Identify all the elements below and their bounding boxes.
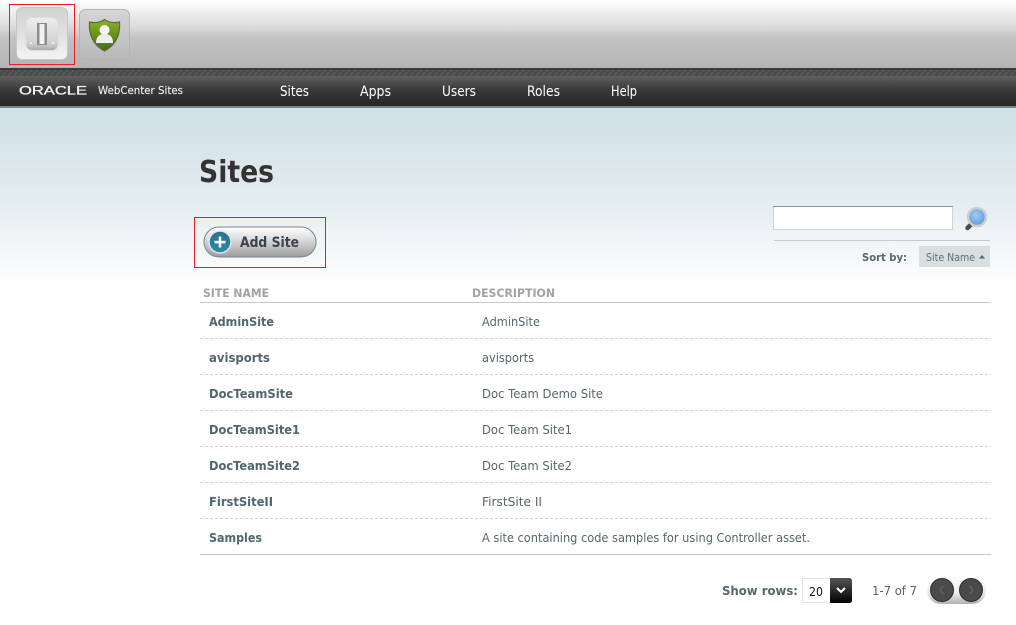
sort control: Sort by: xyxy=(862,251,907,264)
site names: DocTeamSite2 xyxy=(209,459,300,473)
navigation bar xyxy=(0,68,1016,108)
sort control: Site Name xyxy=(926,251,975,264)
icon: active sites tile xyxy=(16,8,68,60)
add site button: Add Site xyxy=(240,235,299,251)
top toolbar xyxy=(0,0,1016,68)
nav links: Sites xyxy=(280,84,309,100)
descriptions xyxy=(482,315,810,545)
nav links xyxy=(280,84,637,100)
sites table xyxy=(200,286,991,555)
site names: FirstSiteII xyxy=(209,495,273,509)
icon: plus xyxy=(209,231,231,253)
table header: SITE NAME xyxy=(203,286,269,300)
add site button xyxy=(204,227,316,257)
site names: DocTeamSite1 xyxy=(209,423,300,437)
site names: DocTeamSite xyxy=(209,387,293,401)
descriptions: A site containing code samples for using Controller asset. xyxy=(482,531,810,545)
site names: AdminSite xyxy=(209,315,274,329)
nav links: Roles xyxy=(527,84,560,100)
table header xyxy=(203,286,555,300)
icon: users shield tile xyxy=(80,10,130,60)
sort control xyxy=(862,246,990,267)
icon: magnifier xyxy=(968,208,986,228)
descriptions: AdminSite xyxy=(482,315,540,329)
site names: Samples xyxy=(209,531,262,545)
logo: Oracle WebCenter Sites: WebCenter Sites xyxy=(98,85,183,97)
descriptions: avisports xyxy=(482,351,534,365)
heading: Sites xyxy=(199,155,274,190)
search box xyxy=(773,206,986,230)
pagination: 1-7 of 7 xyxy=(872,584,917,598)
nav links: Help xyxy=(611,84,637,100)
site names xyxy=(209,315,300,545)
pager buttons xyxy=(927,577,986,604)
rows selector xyxy=(802,578,852,603)
descriptions: Doc Team Site2 xyxy=(482,459,572,473)
red highlight: sites tile xyxy=(10,4,74,64)
descriptions: FirstSite II xyxy=(482,495,542,509)
logo: Oracle WebCenter Sites xyxy=(19,85,183,98)
nav links: Users xyxy=(442,84,476,100)
descriptions: Doc Team Demo Site xyxy=(482,387,603,401)
red highlight: add site xyxy=(194,218,326,268)
logo: Oracle WebCenter Sites: ORACLE xyxy=(19,86,87,98)
descriptions: Doc Team Site1 xyxy=(482,423,572,437)
pagination: Show rows: xyxy=(722,584,798,598)
rows selector: 20 xyxy=(809,585,823,599)
nav links: Apps xyxy=(360,84,391,100)
table header: DESCRIPTION xyxy=(472,286,555,300)
pagination xyxy=(722,577,986,604)
site names: avisports xyxy=(209,351,270,365)
